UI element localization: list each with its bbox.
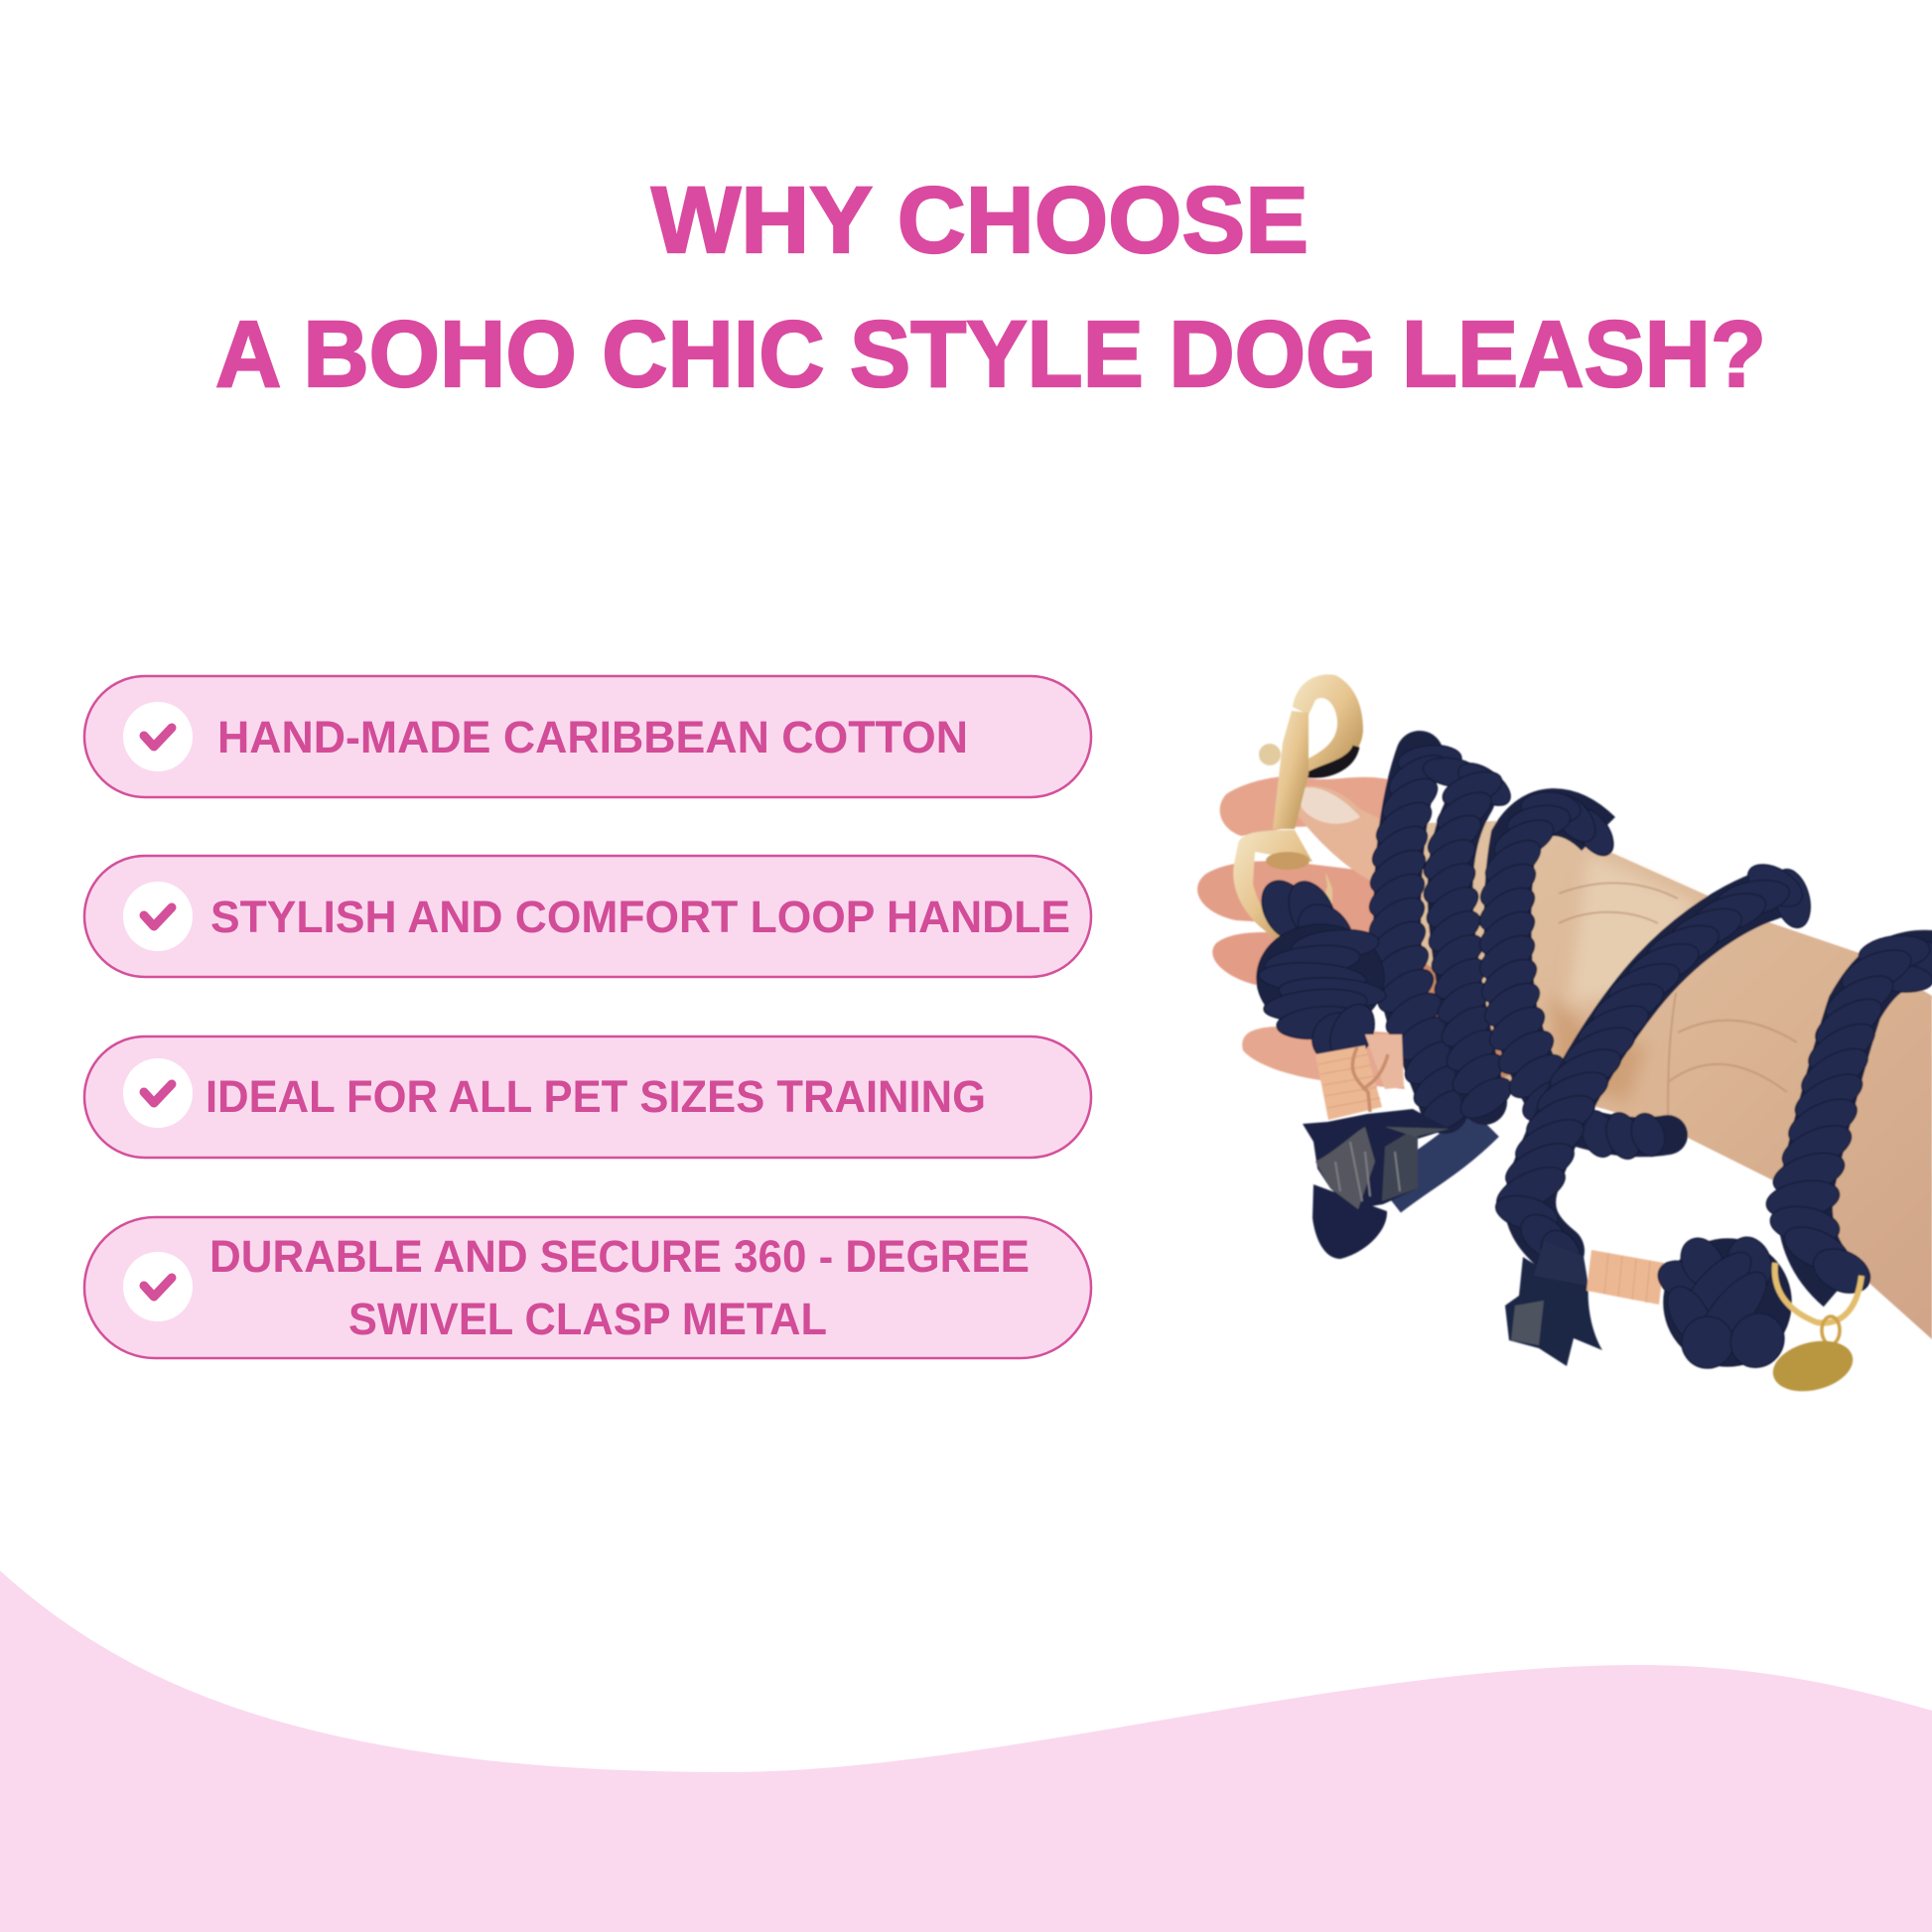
title	[215, 168, 1766, 407]
benefit text 4	[209, 1231, 1030, 1344]
title: A BOHO CHIC STYLE DOG LEASH?	[215, 302, 1766, 407]
rope knot near clasp	[1252, 872, 1387, 1072]
icon: check 1	[123, 702, 193, 771]
benefit text 4: SWIVEL CLASP METAL	[348, 1294, 827, 1344]
benefit text 1: HAND-MADE CARIBBEAN COTTON	[217, 712, 968, 762]
panel: benefit pill 2	[84, 856, 1091, 977]
panel: benefit pill 3	[84, 1036, 1091, 1158]
rope coil 1	[1362, 743, 1480, 1139]
peach wrap 2	[1587, 1250, 1664, 1305]
rope under wrist	[1549, 1106, 1671, 1164]
rope end under tassel	[1312, 1122, 1484, 1259]
finger: ring	[1212, 932, 1291, 985]
rope coil 2	[1418, 754, 1518, 1126]
rope coil 4 across the hand	[1490, 856, 1816, 1283]
snap hook clasp	[1233, 674, 1363, 940]
rope knot at tag	[1652, 1230, 1795, 1379]
finger: pinky	[1242, 1027, 1405, 1089]
pinky strip near wrap	[1365, 1035, 1404, 1089]
panel: benefit pill 1	[84, 676, 1091, 797]
hand and forearm	[1390, 820, 1932, 1339]
icon: check 2	[123, 882, 193, 951]
tassel 1	[1303, 1109, 1449, 1209]
finger: middle	[1197, 861, 1390, 953]
thumb nail	[1296, 787, 1360, 824]
rope coil 5 over the forearm	[1763, 931, 1932, 1302]
panel: benefit pill 4	[84, 1217, 1091, 1358]
finger: index	[1220, 776, 1390, 836]
gold ring	[1775, 1263, 1862, 1344]
icon: check 4	[123, 1252, 193, 1321]
benefit text 2: STYLISH AND COMFORT LOOP HANDLE	[210, 892, 1070, 942]
benefit text 4: DURABLE AND SECURE 360 - DEGREE	[209, 1231, 1030, 1282]
thumb	[1293, 786, 1390, 889]
tassel 2	[1505, 1241, 1602, 1366]
background wave	[0, 1571, 1932, 1932]
fingers	[1197, 776, 1405, 1089]
icon: check 3	[123, 1058, 193, 1128]
gold tag	[1767, 1333, 1859, 1399]
rope coil 3	[1472, 786, 1621, 1129]
photo: hand holding navy rope leash	[1197, 674, 1932, 1399]
benefit text 3: IDEAL FOR ALL PET SIZES TRAINING	[206, 1071, 986, 1122]
title: WHY CHOOSE	[651, 168, 1309, 273]
peach wrap 1	[1315, 1045, 1388, 1120]
